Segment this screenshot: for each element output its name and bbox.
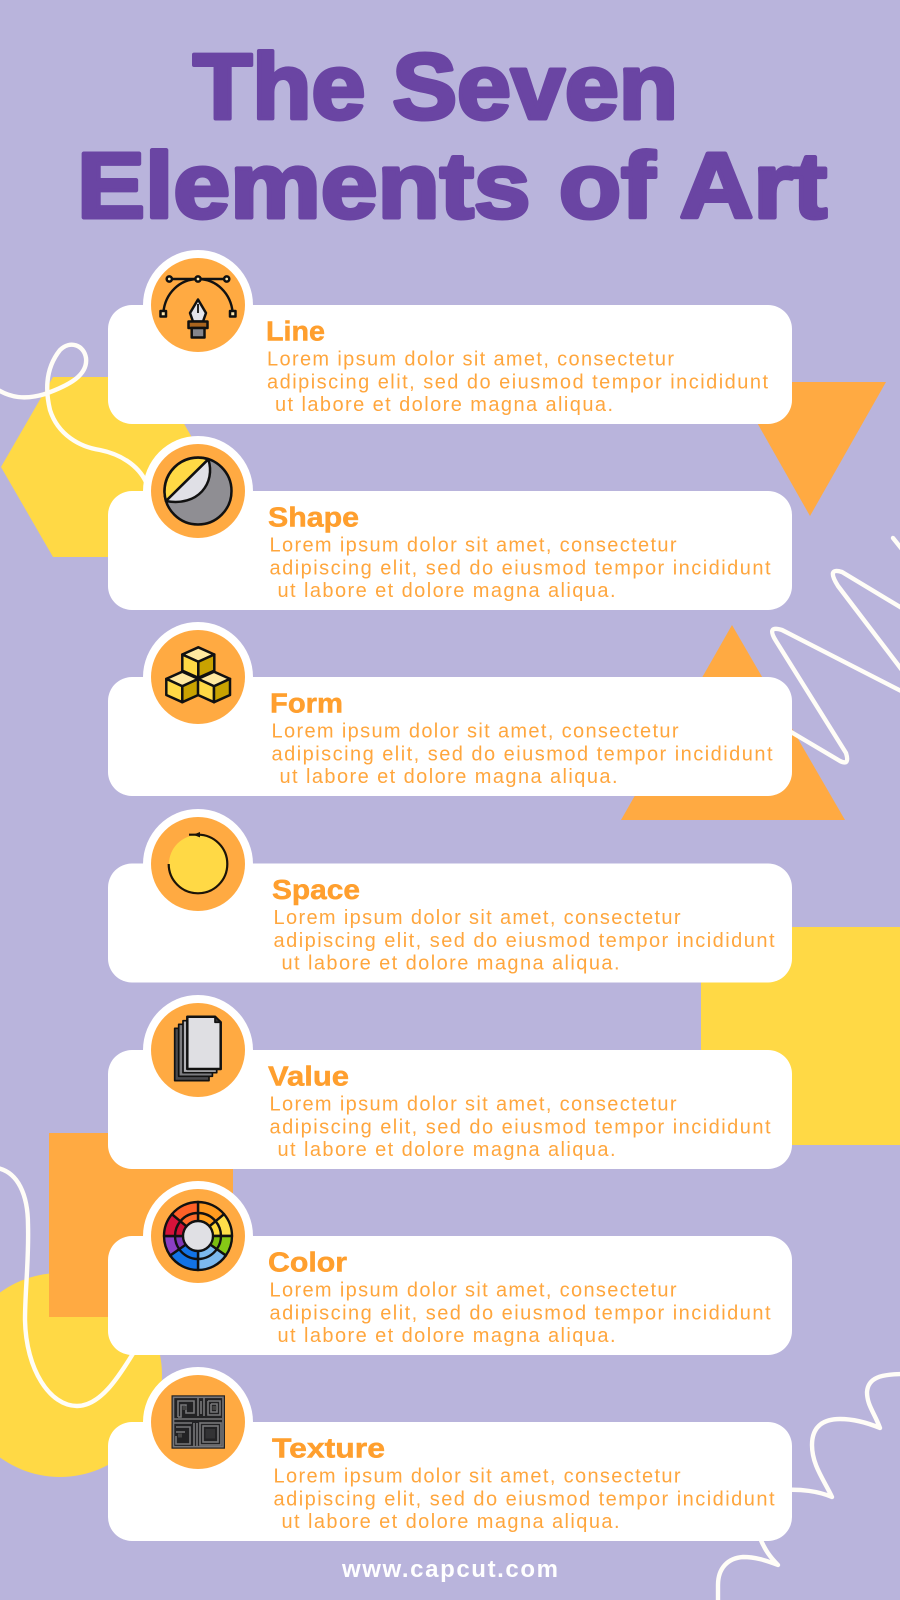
text block xyxy=(270,1280,771,1347)
icon: maze texture xyxy=(143,1367,253,1477)
card background xyxy=(108,1236,792,1355)
panel: Shape xyxy=(108,436,792,610)
squiggle: bottom left xyxy=(0,1168,134,1406)
text block: ut labore et dolore magna aliqua. xyxy=(282,952,620,974)
text block xyxy=(270,1094,771,1161)
text block: ut labore et dolore magna aliqua. xyxy=(275,394,613,416)
text block: adipiscing elit, sed do eiusmod tempor incididunt xyxy=(270,1302,771,1324)
heading: Shape xyxy=(268,502,359,532)
yellow hexagon xyxy=(1,377,209,557)
text block: adipiscing elit, sed do eiusmod tempor incididunt xyxy=(270,558,771,580)
footer url: www.capcut.com xyxy=(341,1556,558,1583)
text block: Lorem ipsum dolor sit amet, consectetur xyxy=(270,534,677,556)
heading: Line xyxy=(266,316,325,346)
orange triangle xyxy=(621,625,845,820)
text block: Lorem ipsum dolor sit amet, consectetur xyxy=(274,907,681,929)
card background xyxy=(108,491,792,610)
icon: bezier pen tool xyxy=(143,250,253,360)
text block xyxy=(267,348,768,416)
text block: ut labore et dolore magna aliqua. xyxy=(278,1139,616,1161)
text block xyxy=(274,907,775,974)
heading: Color xyxy=(268,1246,347,1278)
text block: ut labore et dolore magna aliqua. xyxy=(278,1325,616,1347)
panel: Color xyxy=(108,1181,792,1355)
icon: circle with arrow xyxy=(143,809,253,919)
card background xyxy=(108,305,792,424)
squiggle: top left loop xyxy=(0,345,146,482)
icon: shaded sphere xyxy=(143,436,253,546)
panel: Line xyxy=(108,250,792,424)
text block: Lorem ipsum dolor sit amet, consectetur xyxy=(274,1466,681,1488)
title: Elements of Art xyxy=(77,134,827,238)
icon: stacked pages xyxy=(143,995,253,1105)
text block: Lorem ipsum dolor sit amet, consectetur xyxy=(270,1280,677,1302)
icon: stacked cubes xyxy=(143,622,253,732)
text block: adipiscing elit, sed do eiusmod tempor incididunt xyxy=(272,744,773,766)
card background xyxy=(108,677,792,796)
panel: Space xyxy=(108,809,792,982)
panel: Value xyxy=(108,995,792,1169)
yellow circle xyxy=(0,1273,162,1477)
text block: adipiscing elit, sed do eiusmod tempor incididunt xyxy=(270,1116,771,1138)
title: The Seven xyxy=(193,34,678,138)
heading: Texture xyxy=(272,1432,385,1464)
icon: color wheel xyxy=(143,1181,253,1291)
text block: adipiscing elit, sed do eiusmod tempor incididunt xyxy=(267,372,768,394)
text block: ut labore et dolore magna aliqua. xyxy=(282,1511,620,1533)
heading: Space xyxy=(272,874,360,905)
orange square xyxy=(49,1133,233,1317)
text block: Lorem ipsum dolor sit amet, consectetur xyxy=(270,1094,677,1116)
squiggle: bottom right xyxy=(718,1374,900,1600)
squiggle: right zigzag xyxy=(772,538,900,762)
text block: adipiscing elit, sed do eiusmod tempor incididunt xyxy=(274,930,775,952)
panel: Texture xyxy=(108,1367,792,1541)
text block: Lorem ipsum dolor sit amet, consectetur xyxy=(267,348,674,370)
text block: Lorem ipsum dolor sit amet, consectetur xyxy=(272,720,679,742)
text block: ut labore et dolore magna aliqua. xyxy=(278,580,616,602)
text block: adipiscing elit, sed do eiusmod tempor incididunt xyxy=(274,1488,775,1510)
card background xyxy=(108,1050,792,1169)
text block xyxy=(272,720,773,788)
heading: Value xyxy=(268,1060,349,1092)
title xyxy=(77,34,827,238)
yellow square xyxy=(701,927,900,1145)
orange inverted triangle xyxy=(734,382,886,516)
card background xyxy=(108,1422,792,1541)
panel: Form xyxy=(108,622,792,796)
text block: ut labore et dolore magna aliqua. xyxy=(280,766,618,788)
text block xyxy=(270,534,771,602)
heading: Form xyxy=(270,688,343,718)
card background xyxy=(108,864,792,982)
text block xyxy=(274,1466,775,1533)
